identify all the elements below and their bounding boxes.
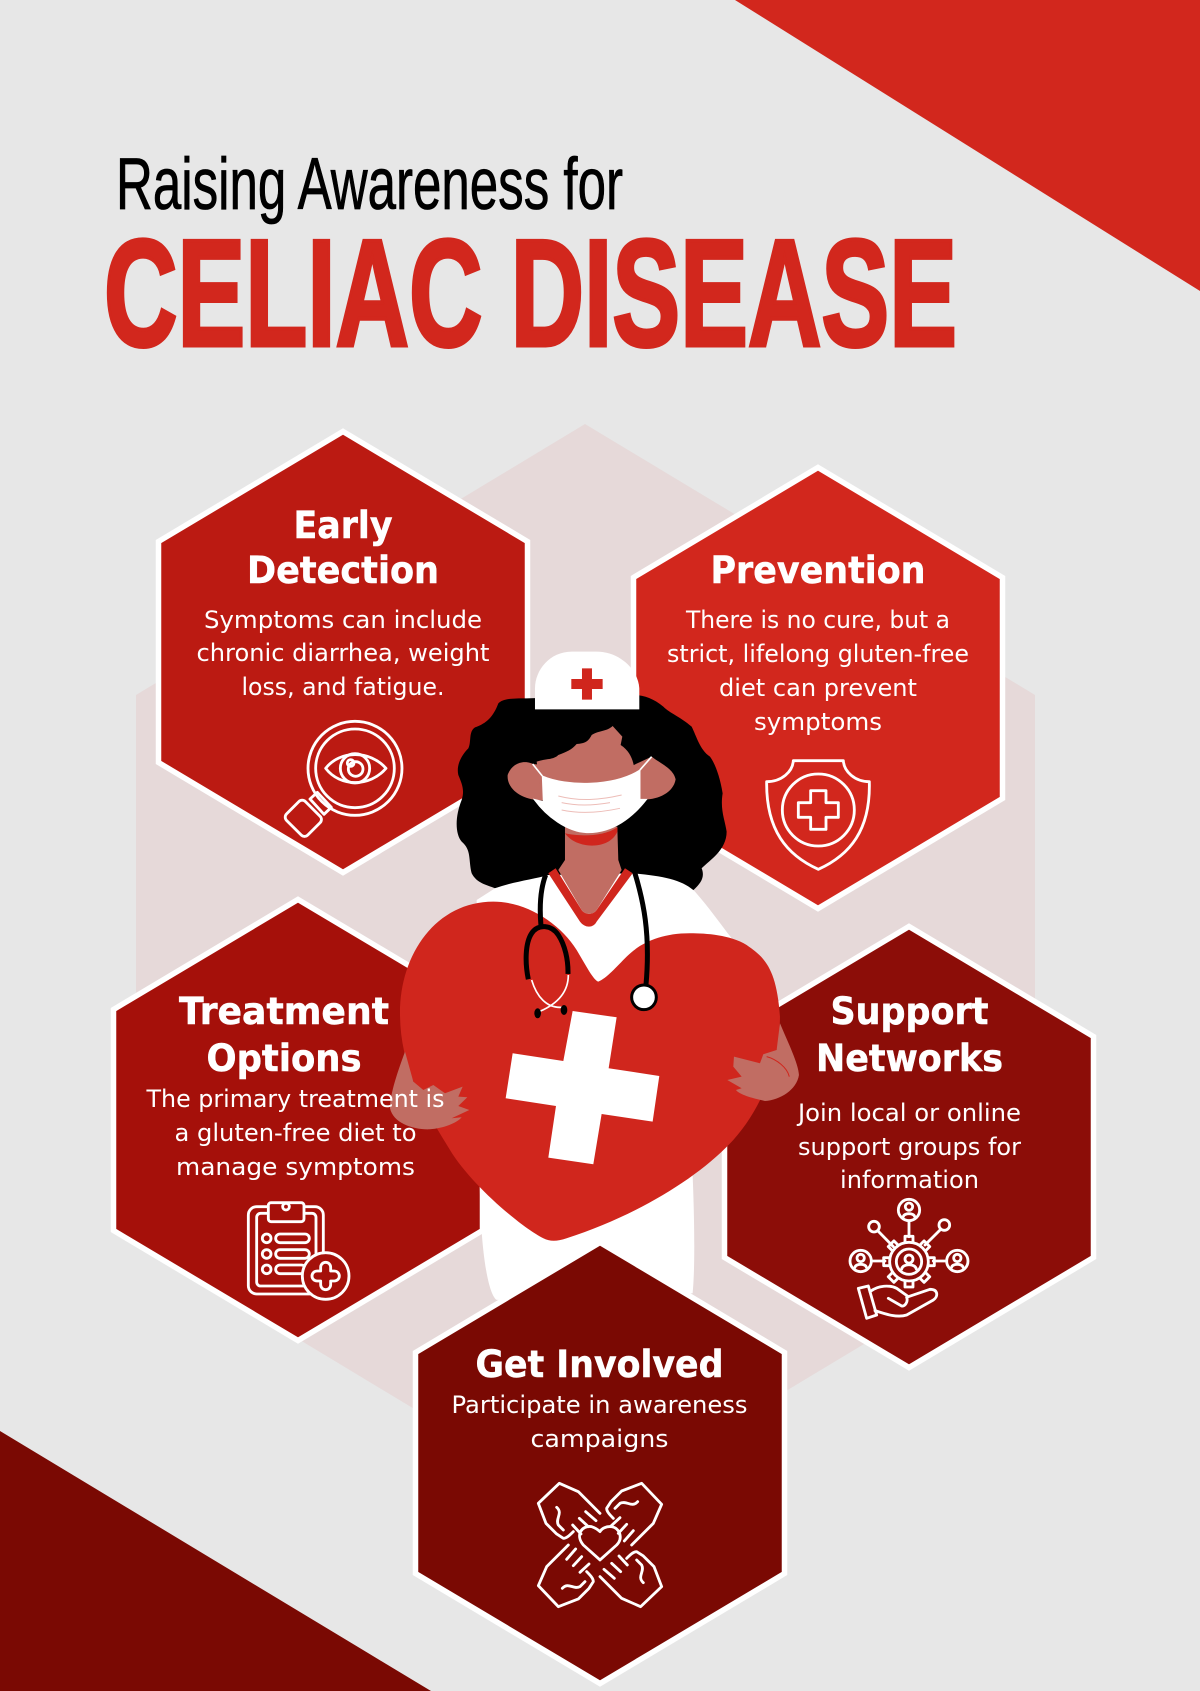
title	[104, 144, 957, 378]
text: get involved body: Participate in awareness	[452, 1391, 748, 1419]
heading: early detection: Early	[294, 504, 392, 547]
heading: support networks: Networks	[816, 1037, 1003, 1080]
heading: early detection	[247, 504, 439, 592]
text: treatment options	[146, 990, 444, 1181]
text: support networks body	[796, 1099, 1021, 1194]
face mask	[533, 757, 652, 833]
panel: early detection	[158, 432, 528, 872]
text: early detection body	[196, 606, 490, 701]
icon: clipboard with plus	[248, 1203, 349, 1299]
heart	[400, 902, 780, 1241]
icon: shield with cross	[767, 761, 869, 869]
icon: magnifier with eye	[283, 721, 402, 838]
heading: treatment options: Options	[206, 1037, 362, 1080]
heading: treatment options: Treatment	[179, 990, 389, 1033]
text: prevention body: There is no cure, but a	[685, 606, 950, 634]
face	[537, 726, 640, 807]
text: early detection body: Symptoms can include	[204, 606, 482, 634]
right arm and hand	[727, 1023, 799, 1101]
heading: treatment options	[179, 990, 389, 1080]
text: prevention body: symptoms	[754, 708, 882, 736]
text: get involved body: campaigns	[530, 1425, 668, 1453]
panel: support networks	[724, 926, 1094, 1368]
panel: get involved	[416, 1242, 784, 1684]
nurse hat	[535, 652, 639, 709]
ears	[508, 757, 676, 802]
heading: support networks	[816, 990, 1003, 1080]
stethoscope	[526, 870, 656, 1018]
icon: network of people above a hand	[850, 1199, 968, 1318]
nurse hair	[457, 695, 727, 892]
text: prevention body: diet can prevent	[719, 674, 917, 702]
heart and arms	[390, 870, 799, 1241]
white coat	[477, 873, 732, 1300]
heading: get involved: Get Involved	[476, 1343, 724, 1386]
nurse illustration holding a heart	[390, 652, 799, 1300]
text: early detection body: loss, and fatigue.	[242, 673, 444, 701]
subtitle: raising awareness for: Raising Awareness for	[116, 144, 623, 225]
red scrub collar	[548, 868, 633, 927]
panel: prevention	[634, 468, 1002, 908]
neck	[558, 827, 622, 914]
text: support networks body: Join local or online	[796, 1099, 1021, 1127]
icon: four hands around a heart	[538, 1483, 662, 1607]
body: treatment options: The primary treatment is	[146, 1085, 444, 1113]
body: treatment options	[146, 1085, 444, 1181]
white cross on heart	[506, 1011, 659, 1164]
text: get involved body	[452, 1391, 748, 1453]
text: prevention body: strict, lifelong gluten-free	[667, 640, 969, 668]
pale background hexagon	[136, 424, 1035, 1512]
panel: treatment options background and icon	[114, 900, 482, 1340]
heading: prevention: Prevention	[710, 549, 926, 592]
text: support networks body: information	[840, 1166, 979, 1194]
top right red triangle	[735, 0, 1200, 291]
text: support networks body: support groups for	[798, 1133, 1021, 1161]
body: treatment options: manage symptoms	[176, 1153, 415, 1181]
neck band	[565, 827, 617, 846]
text: early detection body: chronic diarrhea, weight	[196, 639, 490, 667]
bottom left dark red triangle	[0, 1431, 431, 1691]
left arm and hand	[390, 1052, 469, 1129]
text: prevention body	[667, 606, 969, 736]
heading: early detection: Detection	[247, 549, 439, 592]
body: treatment options: a gluten-free diet to	[174, 1119, 416, 1147]
heading: support networks: Support	[830, 990, 988, 1033]
